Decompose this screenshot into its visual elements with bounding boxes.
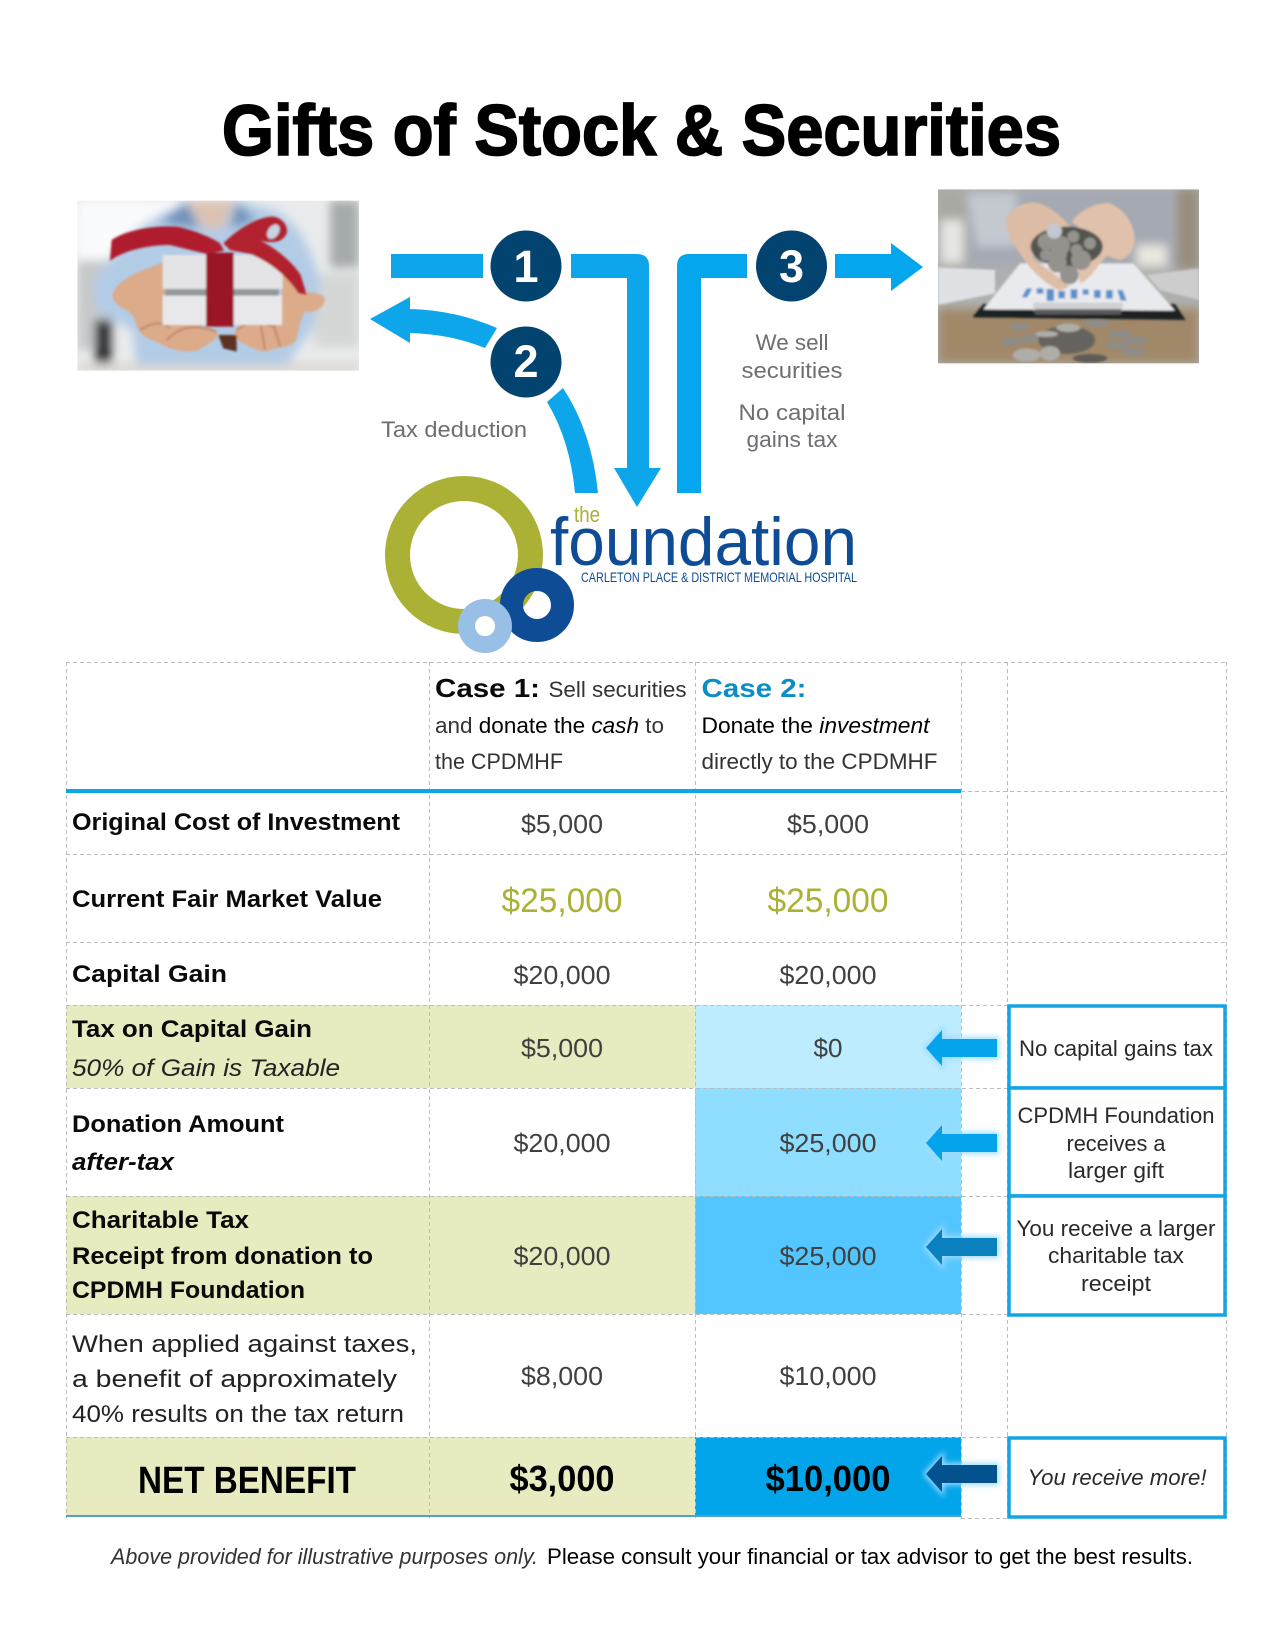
arrow: larger gift [926, 1125, 997, 1161]
table cell fills [66, 1005, 961, 1516]
foundation logo: CARLETON PLACE & DISTRICT MEMORIAL HOSPITAL [581, 569, 857, 585]
row: tax benefit: $8,000 [521, 1361, 603, 1391]
foundation logo [398, 488, 857, 644]
callout: you receive more [1009, 1438, 1225, 1517]
case 2 header: directly to the CPDMHF [702, 749, 938, 774]
row: net benefit: $10,000 [766, 1458, 890, 1499]
row: current fair market value: Current Fair Market Value [72, 886, 382, 913]
row: current fair market value: $25,000 [502, 882, 622, 920]
row: charitable tax receipt: Receipt from donation to [72, 1243, 373, 1270]
callout: you receive more: You receive more! [1028, 1465, 1206, 1490]
row: charitable tax receipt: $20,000 [514, 1241, 610, 1271]
title: Gifts of Stock & Securities [222, 92, 1061, 171]
arrow: you receive more [926, 1456, 997, 1492]
label: we sell securities, no capital gains tax: We sell [756, 330, 828, 355]
case 1 header: Sell securities [548, 677, 686, 702]
label: we sell securities, no capital gains tax: No capital [738, 400, 846, 425]
arrow: foundation to step 3 and on to securities [677, 243, 923, 493]
row: tax benefit: When applied against taxes, [72, 1331, 417, 1358]
callout: larger tax receipt: receipt [1081, 1271, 1151, 1296]
row: donation amount [72, 1111, 876, 1176]
row: original cost of investment: $5,000 [787, 809, 869, 839]
label: we sell securities, no capital gains tax: gains tax [746, 427, 838, 452]
label: we sell securities, no capital gains tax: securities [742, 358, 842, 383]
row: original cost of investment: $5,000 [521, 809, 603, 839]
arrow: larger tax receipt [926, 1229, 997, 1265]
case 2 header [702, 673, 938, 774]
process flow diagram [370, 230, 923, 507]
callout: no capital gains tax: No capital gains tax [1019, 1036, 1213, 1061]
row: donation amount: Donation Amount [72, 1111, 284, 1138]
row: current fair market value [72, 882, 888, 920]
callout: larger gift: CPDMH Foundation [1018, 1103, 1214, 1128]
row: tax on capital gain: $0 [814, 1033, 842, 1063]
row: tax benefit [72, 1331, 876, 1428]
photo: hands holding a gift box [77, 201, 359, 373]
arrow: foundation up to step 2 [547, 388, 598, 493]
callout: no capital gains tax [1009, 1006, 1225, 1088]
callout: larger tax receipt [1009, 1196, 1225, 1315]
row: current fair market value: $25,000 [768, 882, 888, 920]
callout: larger tax receipt: You receive a larger [1016, 1216, 1216, 1241]
row: net benefit: $3,000 [510, 1458, 614, 1499]
footer disclaimer: Above provided for illustrative purposes only. [109, 1544, 538, 1569]
case 2 header: Donate the investment [702, 713, 930, 738]
row: tax on capital gain [72, 1016, 842, 1082]
header rule [66, 789, 961, 793]
step number 1 [490, 230, 562, 302]
label: tax deduction: Tax deduction [381, 417, 527, 442]
case 1 header: and donate the cash to [435, 713, 664, 738]
row: tax on capital gain: Tax on Capital Gain [72, 1016, 312, 1043]
arrow: step 2 tax deduction back to donor [370, 297, 497, 348]
step number 1: 1 [513, 241, 539, 292]
footer disclaimer: Please consult your financial or tax advisor to get the best results. [547, 1544, 1193, 1569]
callout: larger gift [1009, 1088, 1225, 1196]
foundation logo: the [574, 502, 600, 527]
row: capital gain: $20,000 [780, 960, 876, 990]
row: tax benefit: $10,000 [780, 1361, 876, 1391]
row: original cost of investment: Original Cost of Investment [72, 809, 400, 836]
case 1 header: Case 1: [435, 673, 540, 703]
bottom rule [66, 1515, 961, 1517]
row: donation amount: $20,000 [514, 1128, 610, 1158]
row: original cost of investment [72, 809, 869, 839]
row: tax benefit: 40% results on the tax return [72, 1401, 404, 1428]
row: charitable tax receipt [72, 1207, 876, 1304]
row: charitable tax receipt: Charitable Tax [72, 1207, 250, 1234]
row: donation amount: after-tax [72, 1149, 176, 1176]
arrow: no capital gains tax [926, 1030, 997, 1066]
callout: larger tax receipt: charitable tax [1048, 1243, 1184, 1268]
row: charitable tax receipt: CPDMH Foundation [72, 1277, 305, 1304]
step number 2: 2 [513, 336, 539, 387]
row: capital gain: Capital Gain [72, 961, 227, 988]
row: tax on capital gain: 50% of Gain is Taxable [72, 1055, 340, 1082]
step number 3: 3 [779, 241, 804, 292]
step number 3 [756, 230, 827, 302]
row: donation amount: $25,000 [780, 1128, 876, 1158]
callout: larger gift: larger gift [1068, 1158, 1164, 1183]
comparison table [66, 662, 1226, 1518]
case 2 header: Case 2: [702, 673, 806, 703]
case 1 header [435, 673, 686, 774]
callout: larger gift: receives a [1066, 1131, 1166, 1156]
footer disclaimer [109, 1544, 1193, 1569]
row: tax benefit: a benefit of approximately [72, 1366, 397, 1393]
case 1 header: the CPDMHF [435, 749, 563, 774]
label: we sell securities, no capital gains tax [738, 330, 846, 452]
row: tax on capital gain: $5,000 [521, 1033, 603, 1063]
row: net benefit [138, 1458, 890, 1502]
arrow: step 1 to the foundation [391, 254, 661, 507]
row: charitable tax receipt: $25,000 [780, 1241, 876, 1271]
row: net benefit: NET BENEFIT [138, 1460, 356, 1502]
row: capital gain [72, 960, 876, 990]
row: capital gain: $20,000 [514, 960, 610, 990]
photo: hands pouring coins over a clipboard [938, 189, 1199, 363]
step number 2 [490, 326, 562, 398]
foundation logo: foundation [550, 504, 857, 580]
